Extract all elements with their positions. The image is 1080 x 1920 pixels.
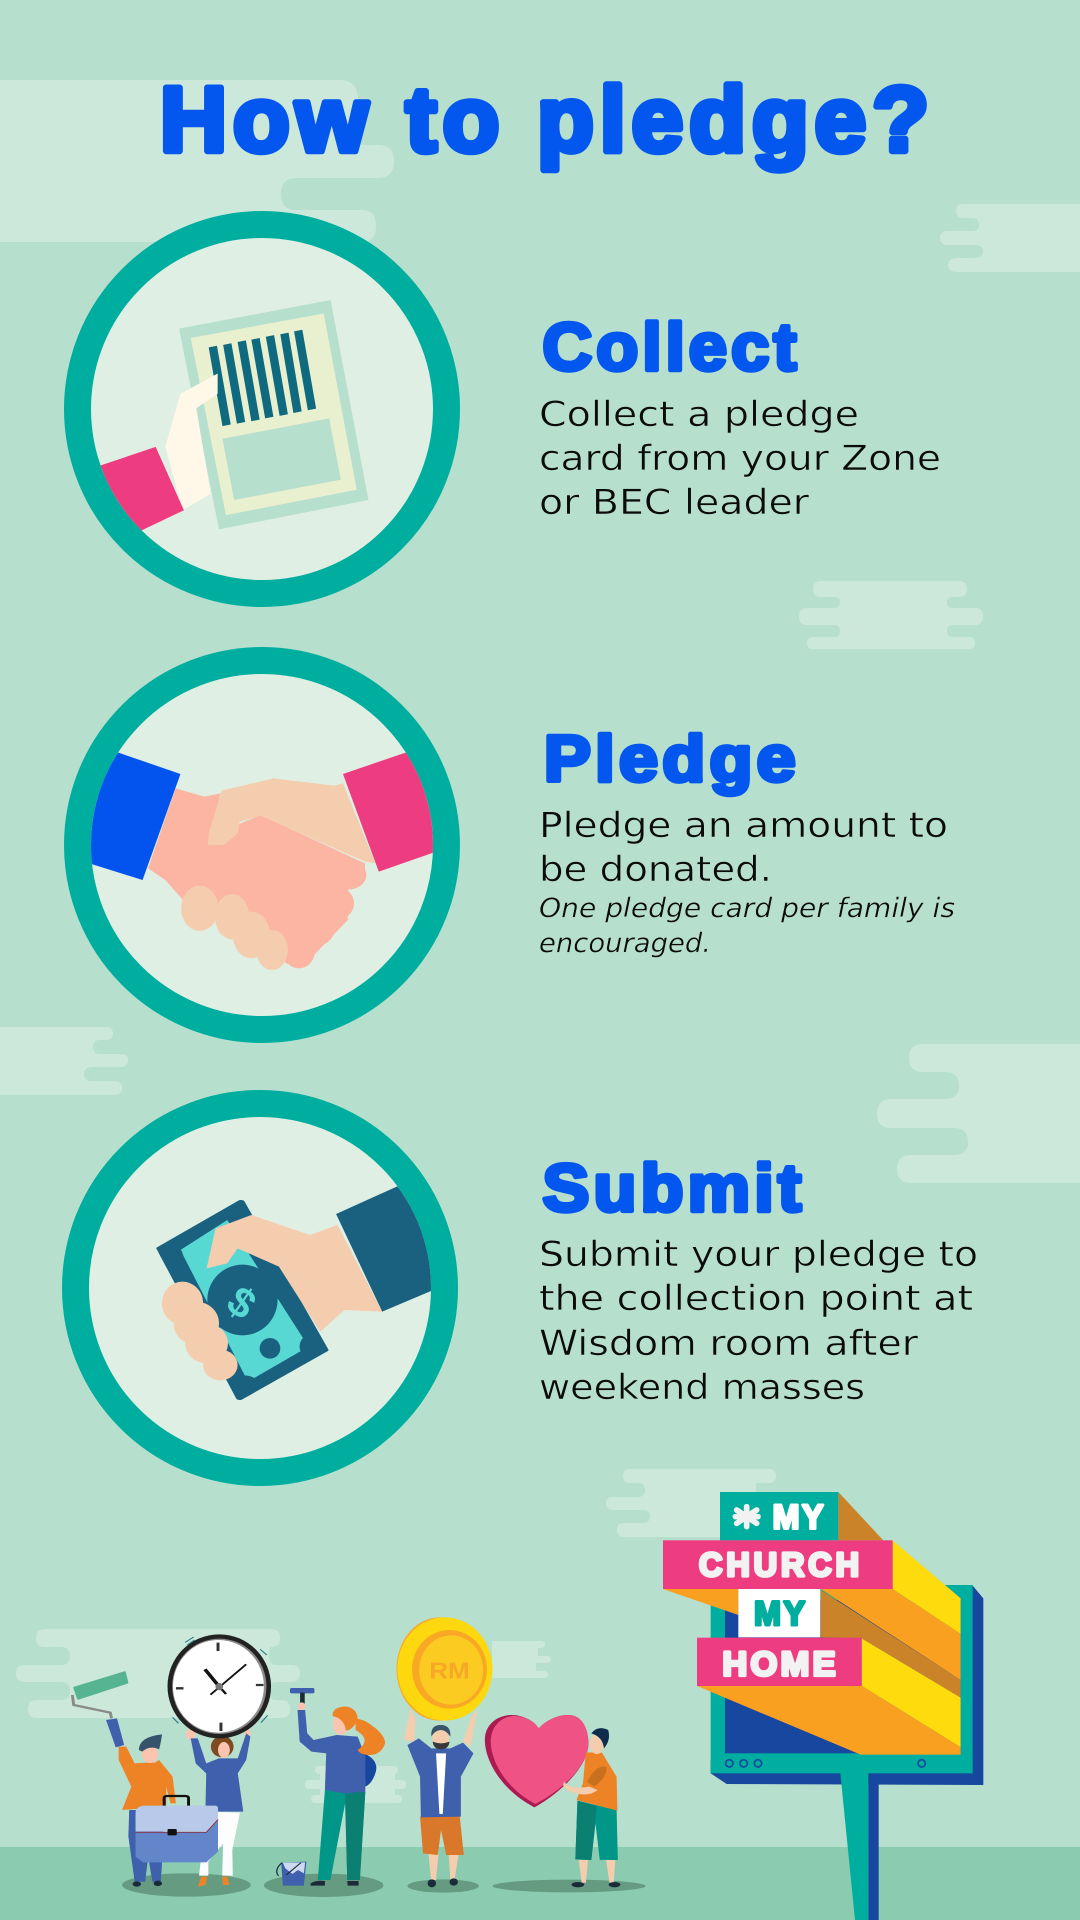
icon: briefcase (136, 1796, 218, 1862)
person with hammer (290, 1688, 385, 1886)
banner: CHURCH (663, 1540, 893, 1589)
billboard: My Church My Home logo (663, 1492, 983, 1920)
icon: hand holding money: $ (219, 1276, 265, 1328)
illustration: people group (72, 1617, 646, 1897)
text: submit description: Wisdom room after (539, 1324, 919, 1364)
panel: submit (76, 1104, 978, 1472)
icon: clock (168, 1634, 271, 1738)
icon: RM coin: RM (429, 1657, 470, 1684)
text: pledge description: be donated. (539, 850, 772, 890)
title: How to pledge? (160, 69, 935, 171)
icon: RM coin (396, 1617, 492, 1721)
panel: collect (78, 224, 941, 594)
text: collect description (539, 395, 941, 523)
text: submit description: the collection point at (539, 1279, 973, 1319)
heading: submit: Submit (542, 1151, 806, 1226)
icon: hand holding pledge card (83, 300, 368, 536)
icon: handshake (76, 752, 448, 970)
banner: HOME: HOME (722, 1646, 839, 1684)
icon: heart (485, 1715, 588, 1807)
text: pledge description: Pledge an amount to (539, 806, 948, 846)
heading: collect: Collect (542, 310, 800, 385)
text: collect description: card from your Zone (539, 439, 941, 479)
banner: MY: MY (773, 1498, 826, 1536)
text: submit description: Submit your pledge to (539, 1235, 978, 1275)
person with paint roller (72, 1672, 176, 1887)
circle frame: pledge (78, 660, 446, 1030)
3D extrusion blocks (663, 1492, 961, 1755)
banner: MY (720, 1492, 838, 1540)
text: collect description: Collect a pledge (539, 395, 859, 435)
circle frame: submit (76, 1104, 444, 1472)
person holding clock (186, 1729, 251, 1887)
ground strip (0, 1847, 1080, 1920)
text: pledge note: encouraged. (539, 928, 711, 959)
banner: HOME (697, 1638, 862, 1686)
billboard frame (711, 1585, 973, 1773)
panel: pledge (76, 660, 955, 1030)
text: submit description (539, 1235, 978, 1408)
heading: pledge: Pledge (544, 722, 800, 795)
ground shadows (122, 1873, 646, 1897)
icon: paint bucket (277, 1862, 306, 1886)
text: pledge note (539, 893, 955, 959)
text: submit description: weekend masses (539, 1368, 865, 1408)
banner: CHURCH: CHURCH (699, 1547, 863, 1584)
text: pledge description (539, 806, 948, 890)
banner: MY white (738, 1589, 820, 1637)
text: pledge note: One pledge card per family is (539, 893, 955, 924)
text: collect description: or BEC leader (539, 483, 810, 523)
circle frame: collect (78, 224, 446, 594)
person holding heart (563, 1728, 620, 1887)
icon: logo mark (735, 1507, 758, 1527)
banner: MY white: MY (754, 1595, 808, 1633)
icon: hand holding money (156, 1186, 431, 1400)
person with coin (404, 1708, 478, 1887)
billboard post (711, 1586, 983, 1920)
